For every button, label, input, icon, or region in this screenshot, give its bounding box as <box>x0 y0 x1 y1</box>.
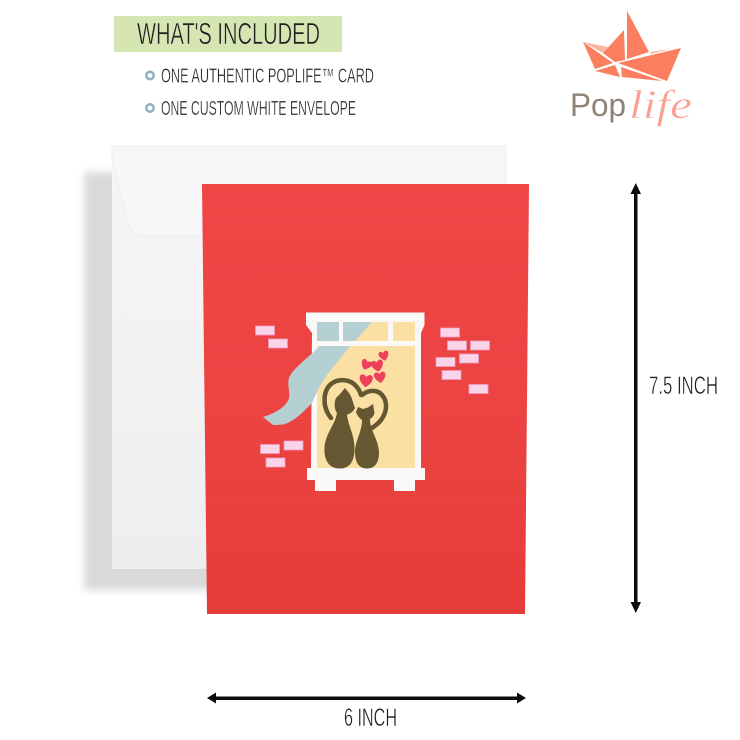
pane 3 <box>393 322 415 341</box>
bricks: left bottom <box>260 441 303 467</box>
pane 1 <box>317 322 339 341</box>
bricks: left top <box>256 326 288 348</box>
window frame <box>306 312 425 491</box>
envelope flap <box>112 146 506 236</box>
envelope body <box>112 146 506 569</box>
pane 2 curtain <box>343 322 372 341</box>
curtain <box>263 346 350 425</box>
text: envelope item: ONE CUSTOM WHITE ENVELOPE <box>161 98 356 120</box>
envelope <box>84 146 506 590</box>
card <box>202 184 529 614</box>
cat left <box>324 388 355 468</box>
cat right <box>355 404 379 468</box>
cats and heart <box>324 380 386 468</box>
label: 6 inch: 6 INCH <box>344 704 397 732</box>
card texture <box>202 184 529 614</box>
heart tail right <box>362 391 386 428</box>
text: card item: ONE AUTHENTIC POPLIFE™ CARD <box>161 66 374 88</box>
arrow: width <box>207 692 526 704</box>
bullet: card <box>146 72 154 79</box>
wordmark: Pop: Pop <box>570 87 626 123</box>
heading: what's included: WHAT'S INCLUDED <box>137 16 320 51</box>
wordmark: life: life <box>629 82 692 127</box>
card face <box>202 184 529 614</box>
heart tail left <box>324 380 361 418</box>
window glass <box>317 346 415 468</box>
pane 2 <box>343 322 388 341</box>
logo: poplife <box>570 11 692 127</box>
list: included items <box>146 66 374 120</box>
envelope shadow <box>84 172 219 590</box>
icon: paper boat <box>583 11 681 81</box>
window <box>263 312 425 491</box>
hearts <box>359 350 390 388</box>
heading: what's included <box>114 16 342 52</box>
bricks: right <box>436 328 490 394</box>
arrow: height <box>630 183 641 613</box>
bullet: envelope <box>146 104 154 112</box>
